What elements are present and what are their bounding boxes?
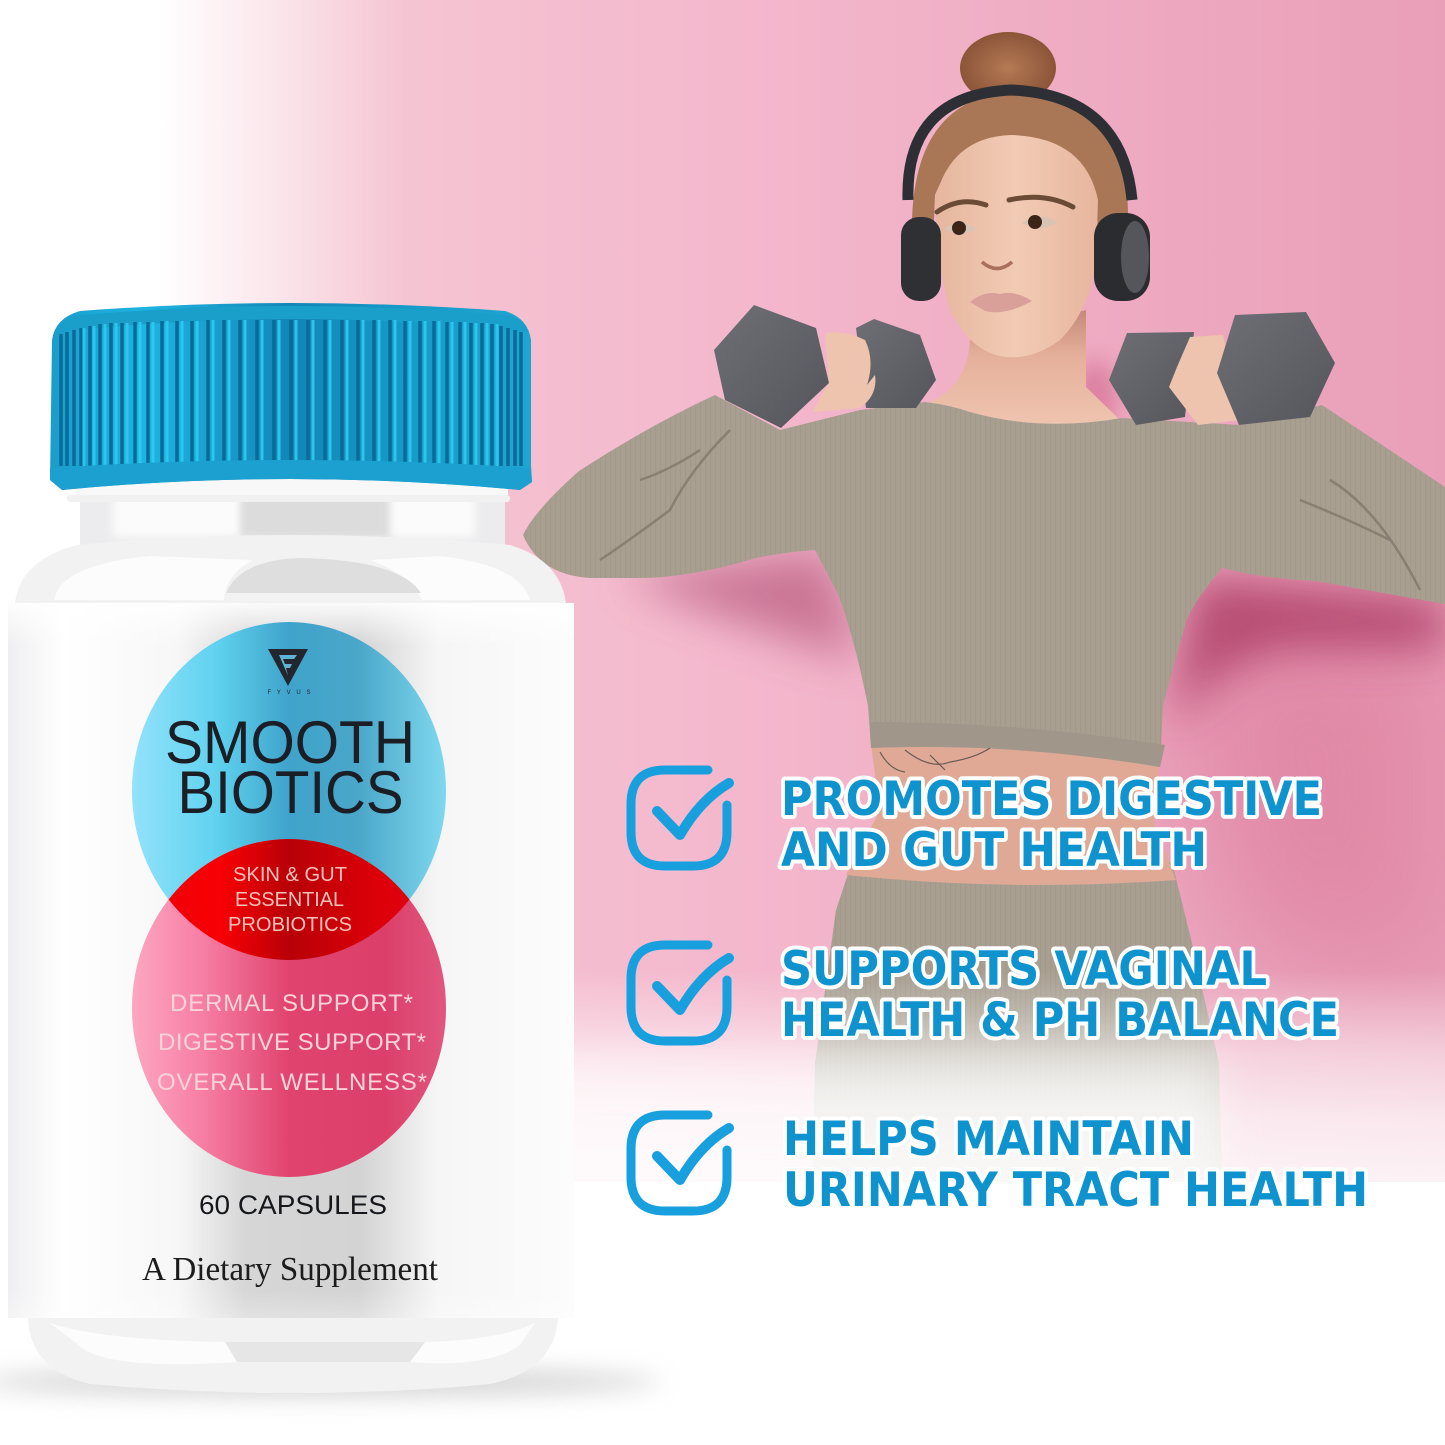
red label text (228, 863, 352, 936)
nose (982, 262, 1012, 268)
right dumbbell (1109, 312, 1335, 425)
logo: FYVUS (268, 690, 310, 696)
support list: DIGESTIVE SUPPORT* (158, 1029, 426, 1056)
bottle label (8, 603, 574, 1318)
capsule count: 60 CAPSULES (199, 1190, 387, 1220)
support list: OVERALL WELLNESS* (157, 1069, 427, 1096)
product name (165, 709, 415, 826)
bottom white fade (0, 970, 1445, 1445)
shoulder highlights (54, 556, 253, 600)
benefit 3 (783, 1112, 1368, 1218)
product name: BIOTICS (178, 759, 404, 826)
bottle body (8, 535, 574, 1393)
pink circle (132, 839, 446, 1177)
support list (157, 990, 427, 1096)
bottle neck (80, 490, 505, 555)
headphones (901, 90, 1150, 301)
benefit 2: HEALTH & PH BALANCE (781, 993, 1339, 1048)
top and arms (523, 395, 1445, 767)
icon: check 3 (631, 1115, 729, 1211)
dietary supplement: A Dietary Supplement (142, 1251, 439, 1288)
benefit 3: URINARY TRACT HEALTH (783, 1163, 1368, 1218)
blue circle (132, 622, 446, 960)
bottle (0, 303, 660, 1396)
benefit 3: HELPS MAINTAIN (783, 1112, 1194, 1167)
support list: DERMAL SUPPORT* (170, 990, 413, 1017)
sleeve creases (600, 430, 1420, 590)
benefit 2 (781, 942, 1339, 1048)
benefit 1: AND GUT HEALTH (781, 823, 1207, 878)
hair bun (960, 32, 1056, 104)
red label text: PROBIOTICS (228, 913, 352, 936)
cap (50, 303, 532, 490)
pink background panel (197, 0, 1445, 1182)
red overlap (168, 839, 410, 960)
bottle shadow (0, 1368, 660, 1396)
tattoo (880, 748, 990, 772)
logo (268, 649, 310, 696)
neck (930, 310, 1120, 427)
base highlights (50, 1323, 237, 1364)
woman with dumbbells (523, 32, 1445, 1182)
red label text: SKIN & GUT (233, 863, 347, 886)
benefit 1 (781, 772, 1322, 878)
icon: check 2 (631, 945, 729, 1041)
top hem (870, 722, 1165, 767)
cap ridges (61, 320, 521, 466)
lips (970, 293, 1032, 312)
product name: SMOOTH (165, 709, 415, 776)
eyes (944, 217, 1058, 234)
benefit 2: SUPPORTS VAGINAL (781, 942, 1267, 997)
midriff (846, 745, 1176, 885)
red label text: ESSENTIAL (235, 888, 344, 911)
leggings (812, 862, 1222, 1182)
left dumbbell (714, 305, 936, 428)
benefit 1: PROMOTES DIGESTIVE (781, 772, 1322, 827)
face (935, 135, 1098, 357)
icon: check 1 (631, 770, 729, 866)
hair (912, 92, 1128, 270)
brows (937, 197, 1073, 212)
